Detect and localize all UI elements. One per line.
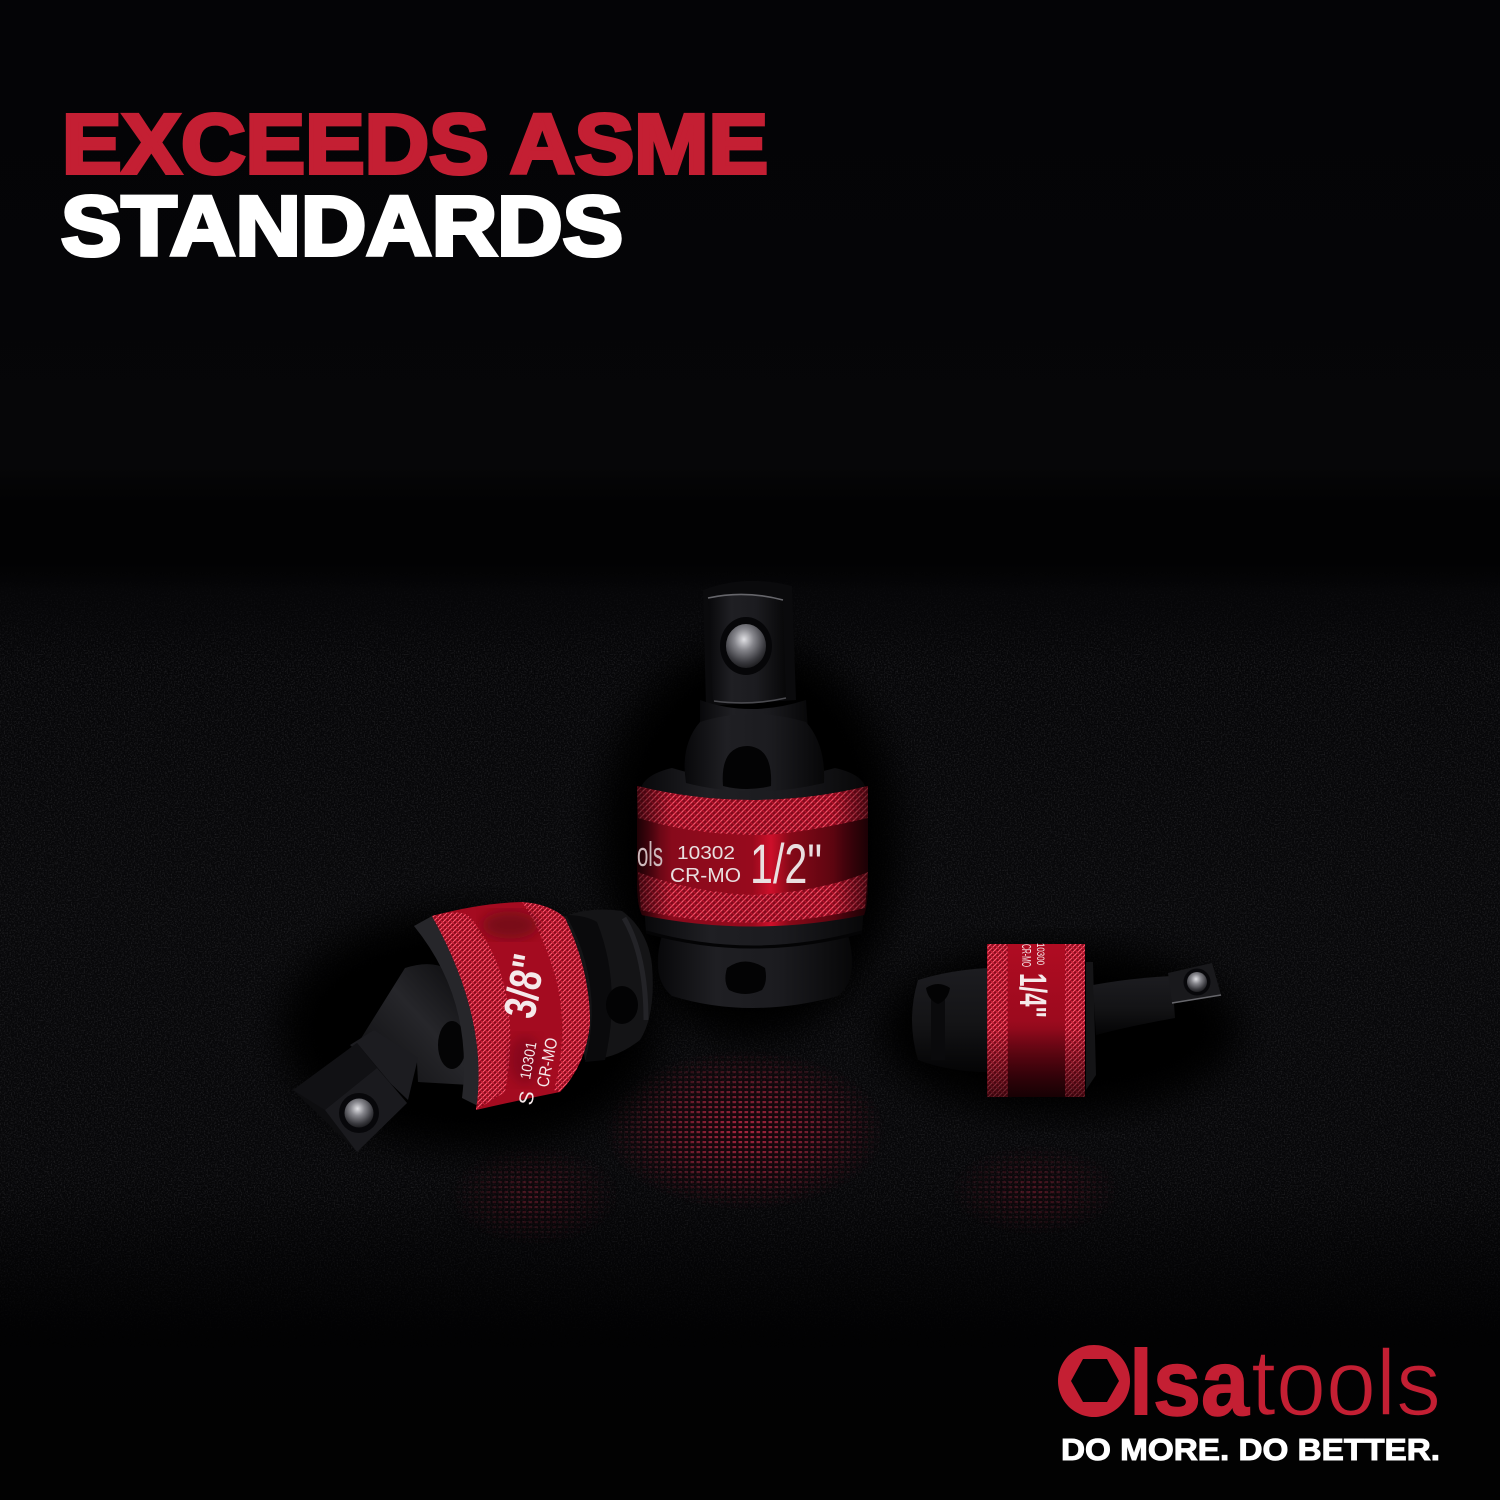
band engraving: CR-MO [1019,944,1034,967]
red knurled band [987,944,1085,1097]
socket end [912,968,988,1072]
logo: Olsatools [1058,1330,1441,1467]
band engraving [494,950,561,1107]
socket adapter: 1/2 inch [637,581,868,1008]
band engraving: S [515,1089,539,1107]
band engraving: CR-MO [670,865,741,887]
band engraving: CR-MO [533,1036,561,1089]
wordmark sa: sa [1153,1330,1250,1435]
band engraving: 10302 [677,843,735,863]
band engraving: 10300 [1034,943,1046,965]
socket end [563,909,653,1062]
band engraving: 10301 [517,1040,541,1081]
socket adapter: 3/8 inch [293,902,653,1152]
socket adapter: 1/4 inch [912,943,1221,1097]
tagline: DO MORE. DO BETTER. [1061,1432,1440,1467]
band engraving: ols [637,836,663,874]
shaft and square drive [1086,962,1221,1090]
band engraving [637,832,822,895]
tool shadows [280,640,1240,1150]
heading line: standards: STANDARDS [61,179,623,273]
band engraving [1011,943,1053,1018]
red knurled band [637,786,868,926]
lower body [644,905,864,1008]
red floor reflection [462,1056,1108,1238]
wordmark tools: tools [1251,1330,1441,1435]
collar [414,916,482,1108]
square drive [703,581,796,706]
heading line: exceeds asme: EXCEEDS ASME [62,97,768,191]
icon: hexagon O [1058,1345,1130,1417]
background [0,594,1500,1294]
red knurled band [432,902,590,1110]
shaft and square drive [293,964,470,1152]
title [61,97,768,273]
neck and ball joint [685,700,824,792]
band engraving: 1/4" [1011,973,1053,1018]
band engraving: 1/2" [750,832,822,895]
collar rim [640,790,866,804]
band engraving: 3/8" [494,950,555,1022]
wordmark l: l [1128,1330,1154,1435]
joint pin hole [723,746,771,789]
top collar [640,768,866,825]
